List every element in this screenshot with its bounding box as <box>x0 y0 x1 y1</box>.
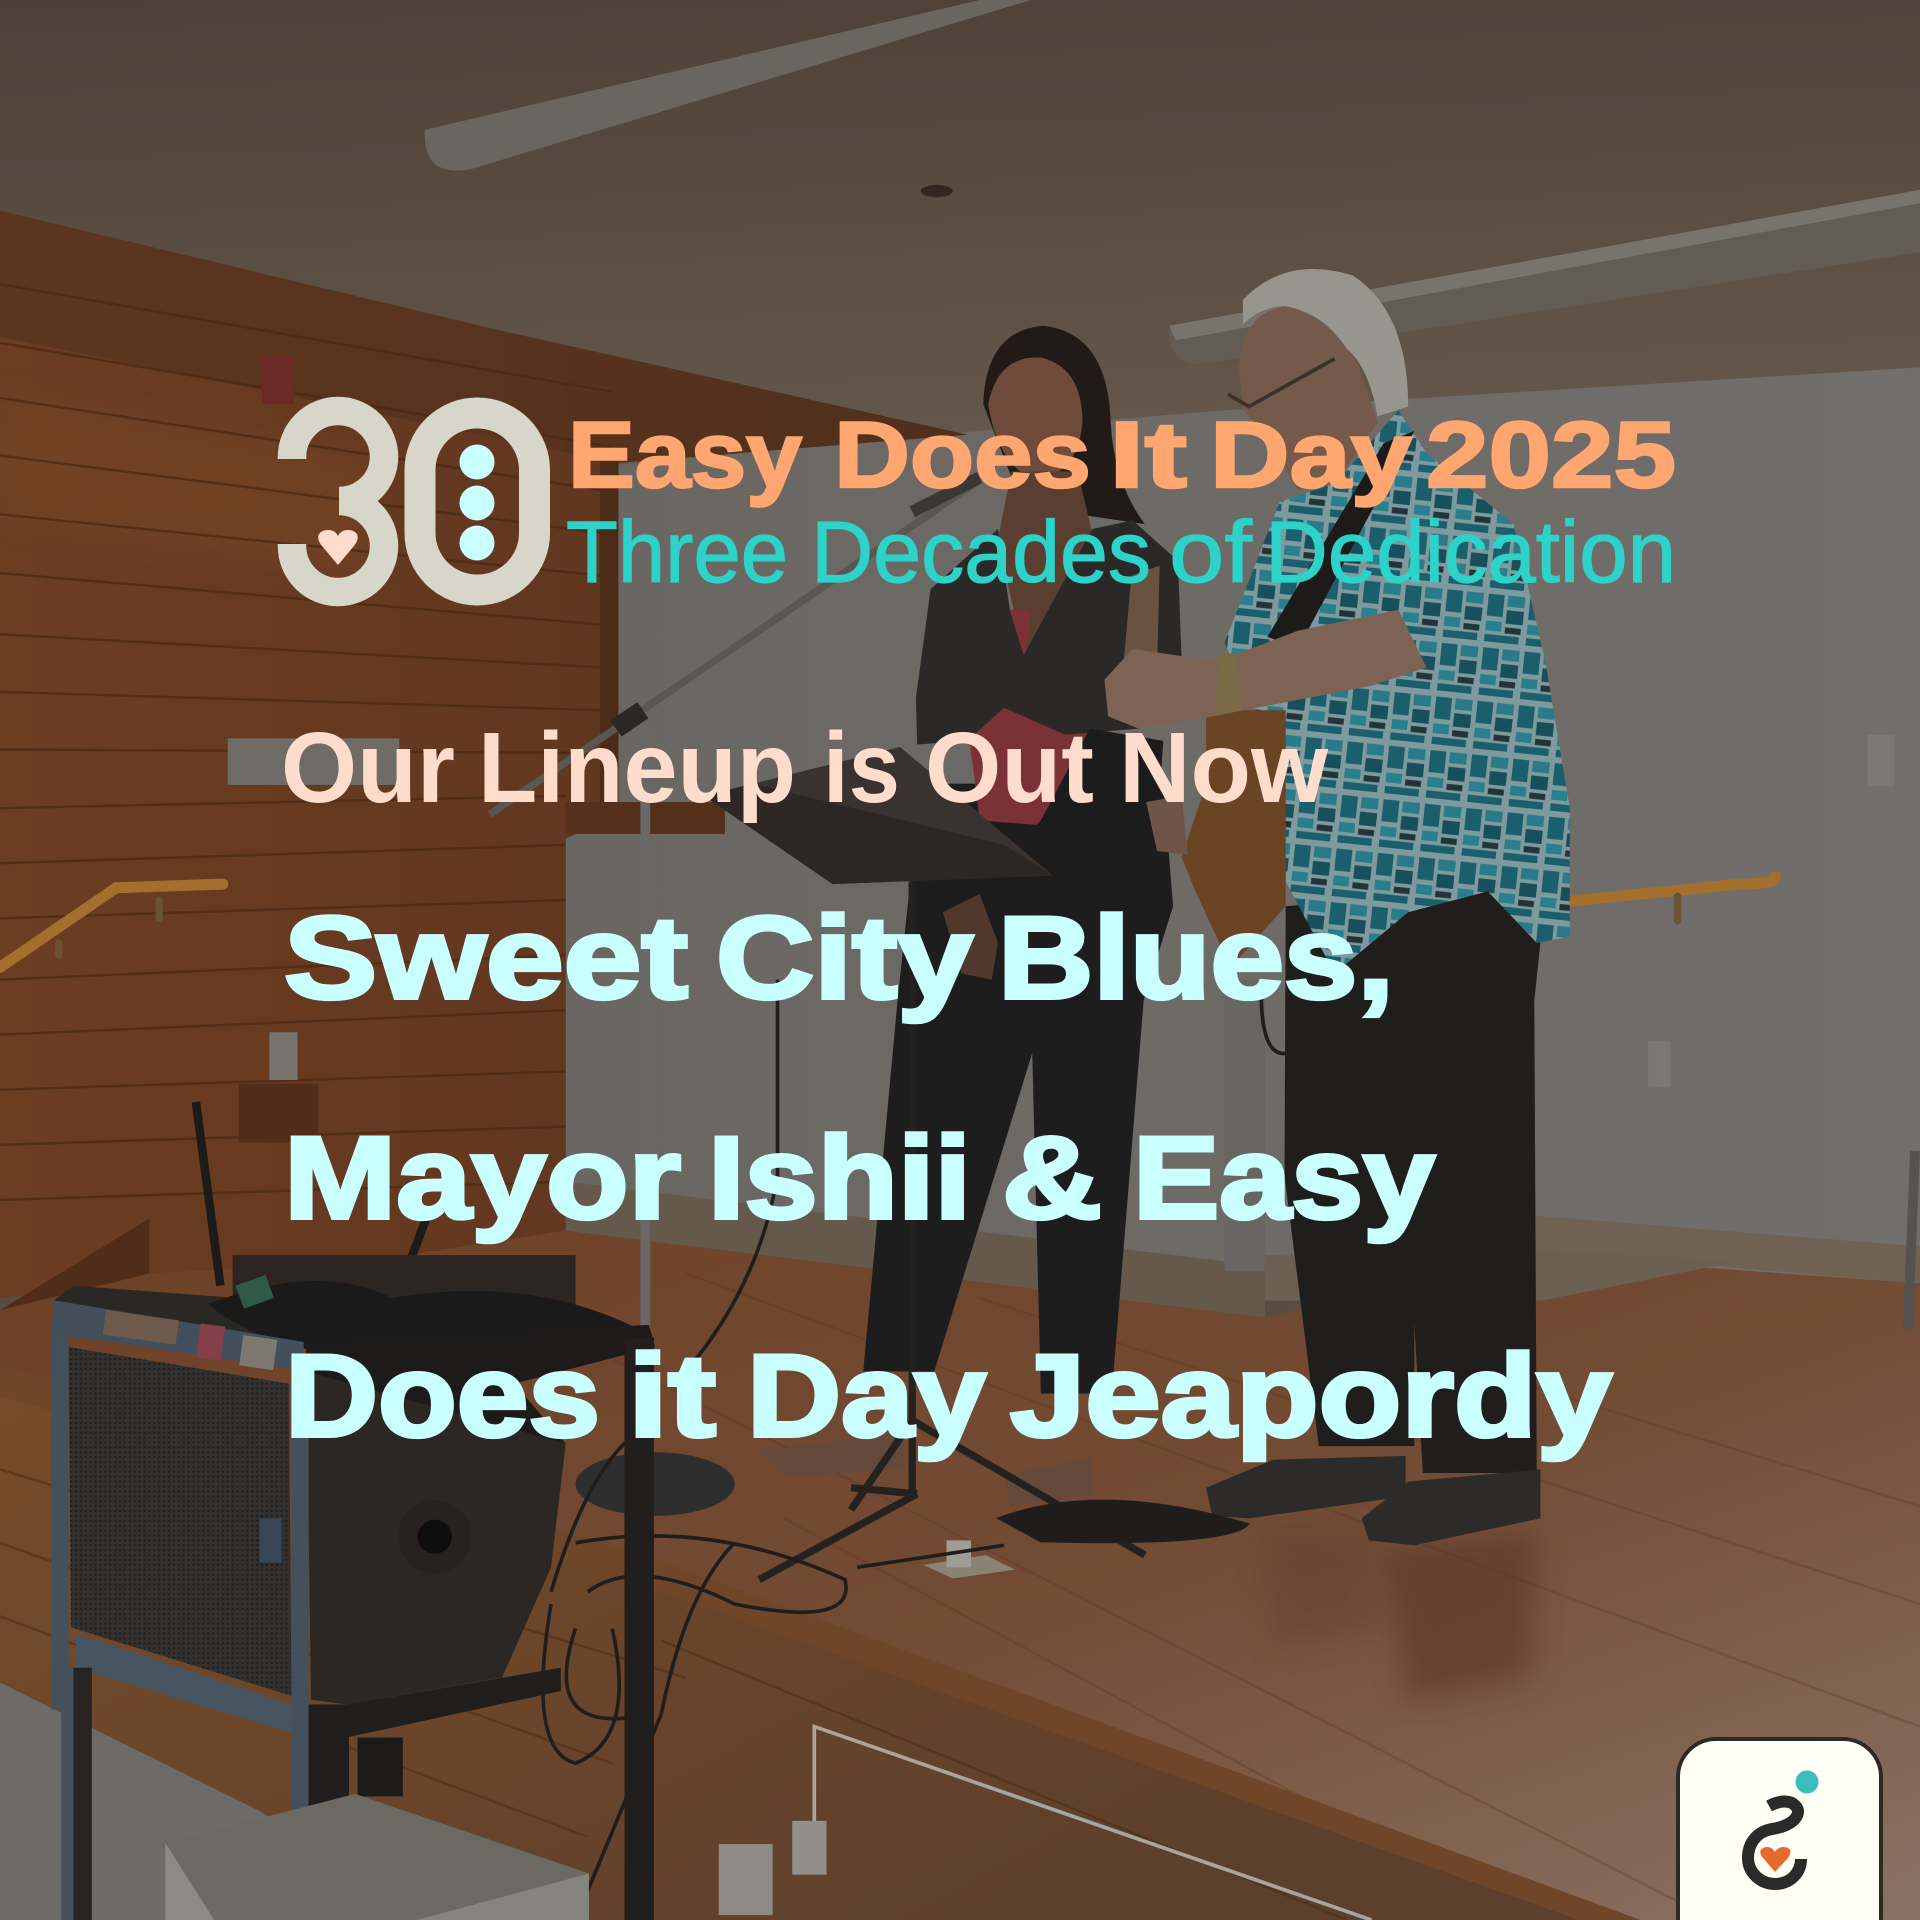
title: 2025 <box>1426 402 1676 507</box>
neck and chest <box>998 471 1092 655</box>
face <box>1239 306 1378 490</box>
speaker on cart <box>51 1102 655 1920</box>
lower hand <box>1146 796 1188 855</box>
title: It <box>1109 402 1187 507</box>
lineup announcement heading: is <box>823 712 900 824</box>
white cable and outlets <box>719 1540 1371 1920</box>
subtitle: Three <box>566 504 788 601</box>
stage front <box>0 1396 1580 1920</box>
woman performer <box>759 326 1182 1506</box>
teal dot <box>1796 1770 1818 1794</box>
right chair leg <box>1908 1151 1915 1329</box>
act: Does it Day Jeapordy: it <box>628 1330 716 1461</box>
floor cables <box>543 980 1288 1920</box>
lineup announcement heading: Lineup <box>478 712 796 824</box>
brand badge <box>1678 1739 1881 1920</box>
act: Sweet City Blues: City <box>716 892 973 1023</box>
cart bars <box>76 1633 291 1733</box>
equipment case <box>165 1794 589 1920</box>
act: Sweet City Blues: Blues, <box>998 892 1394 1023</box>
baseboard <box>566 1182 1265 1318</box>
feet <box>759 1433 1092 1506</box>
30th anniversary logo <box>292 411 534 592</box>
subtitle: of <box>1169 504 1253 601</box>
cable coil <box>208 1281 649 1367</box>
wall fixtures <box>228 355 1894 1142</box>
lineup announcement heading: Our <box>281 712 455 824</box>
watch <box>1215 653 1242 716</box>
ceiling light fixtures <box>425 0 1920 365</box>
act: Mayor Ishii and Easy: Ishii <box>708 1112 971 1243</box>
subtitle: Dedication <box>1265 504 1676 601</box>
hair <box>1243 269 1408 416</box>
legs <box>863 784 1173 1393</box>
act: Does it Day Jeapordy: Day <box>747 1330 986 1461</box>
cardigan <box>916 520 1182 744</box>
guitar strap <box>1267 431 1414 649</box>
act: Does it Day Jeapordy: Does <box>285 1330 600 1461</box>
title: Easy <box>568 402 802 507</box>
title: Does <box>834 402 1091 507</box>
hand <box>943 894 998 980</box>
rear floor <box>1265 1249 1739 1300</box>
orange heart <box>1760 1847 1790 1872</box>
sleeve <box>943 729 1163 967</box>
concrete floor <box>0 1682 416 1920</box>
guitar body <box>1182 710 1286 967</box>
handrails <box>0 877 1776 967</box>
act: Mayor Ishii and Easy: Easy <box>1133 1112 1435 1243</box>
man performer <box>1104 269 1570 1545</box>
three dots <box>460 444 494 560</box>
red top <box>967 610 1136 833</box>
top band <box>51 1300 304 1370</box>
numeral 3 <box>292 411 384 592</box>
wood panel wall <box>0 211 967 1298</box>
speaker side <box>306 1347 566 1704</box>
guitar neck <box>1123 566 1160 671</box>
microphone boom stand <box>490 478 980 1457</box>
numeral 0 <box>420 413 534 590</box>
shoes <box>1206 1456 1540 1545</box>
title: Day <box>1210 402 1412 507</box>
heart <box>318 530 358 565</box>
pillar <box>1224 980 1265 1271</box>
lineup announcement heading: Now <box>1119 712 1328 824</box>
act: Mayor Ishii and Easy: Mayor <box>284 1112 681 1243</box>
stage floor <box>0 1231 1920 1920</box>
floor reflections <box>1261 1524 1537 1702</box>
face <box>988 357 1082 480</box>
subtitle: Decades <box>811 504 1151 601</box>
lineup announcement heading: Out <box>925 712 1094 824</box>
arm <box>1104 610 1427 729</box>
swirl <box>1748 1802 1801 1884</box>
lineup list <box>284 892 1612 1461</box>
shirt <box>1224 410 1570 973</box>
act: Sweet City Blues: Sweet <box>284 892 688 1023</box>
ceiling <box>0 0 1920 514</box>
glasses <box>1228 359 1335 407</box>
music stand <box>704 747 1145 1580</box>
back wall <box>566 367 1920 1286</box>
badge card <box>1678 1739 1881 1920</box>
trousers <box>1284 891 1540 1473</box>
act: Does it Day Jeapordy: Jeapordy <box>1010 1330 1612 1461</box>
speaker grille <box>69 1347 291 1696</box>
act: Mayor Ishii and Easy: & <box>1002 1112 1102 1243</box>
hair <box>983 326 1145 524</box>
